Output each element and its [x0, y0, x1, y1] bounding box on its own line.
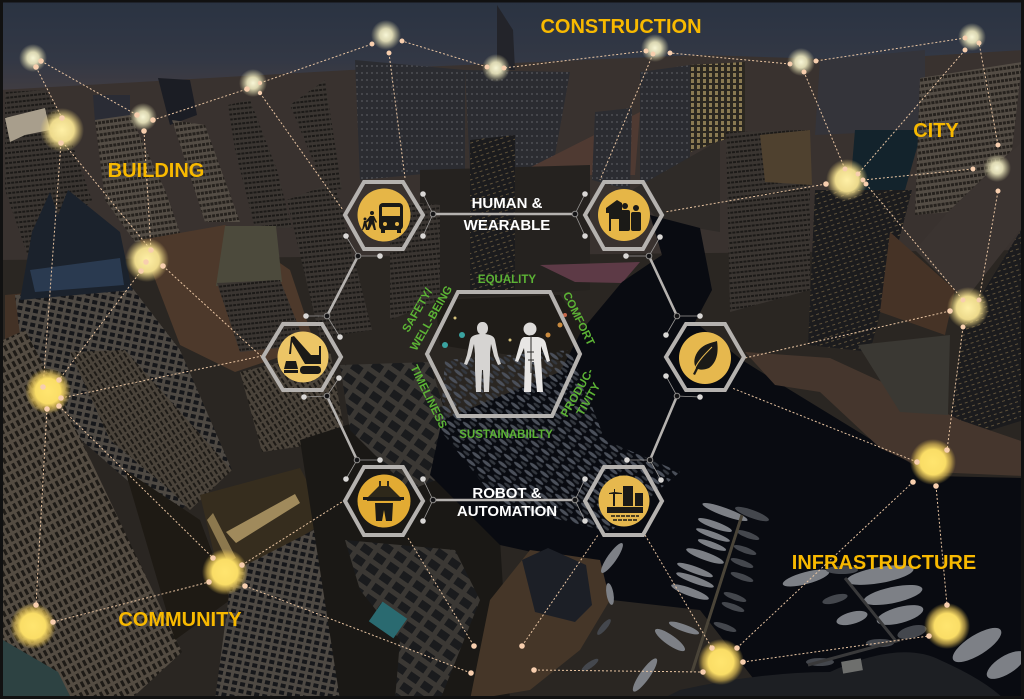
- water: [430, 215, 1024, 700]
- icon hexagon: excavator: [263, 324, 341, 390]
- label: safety well-being: SAFETY/: [401, 286, 436, 335]
- promenade arc: [660, 652, 1005, 700]
- figure: human silhouette: [464, 322, 501, 392]
- marina boats 2: [781, 561, 1024, 684]
- marina boats 1: [668, 500, 770, 672]
- marina boats 3: [580, 541, 688, 694]
- garden and villas: [300, 395, 510, 700]
- label: comfort: COMFORT: [560, 290, 596, 348]
- lower-left towers: [3, 330, 182, 700]
- heading: robot and automation: AUTOMATION: [457, 503, 557, 520]
- icon hexagon: leaf: [666, 324, 744, 390]
- label: timeliness: TIMELINESS: [407, 363, 449, 431]
- bottom-centre tower: [215, 528, 345, 700]
- label: equality: EQUALITY: [478, 274, 536, 286]
- hazy distant city: [0, 50, 1024, 260]
- heading: human and wearable: WEARABLE: [464, 217, 550, 234]
- heading: robot and automation: ROBOT &: [472, 485, 542, 502]
- label: sustainability: SUSTAINABIILTY: [459, 429, 553, 441]
- mid-left buildings: [216, 226, 282, 286]
- round building: [522, 548, 592, 622]
- central marina: [440, 350, 680, 532]
- central hexagon: [427, 292, 580, 416]
- heading: infrastructure: INFRASTRUCTURE: [792, 552, 976, 574]
- hexagon connectors: [301, 191, 703, 524]
- heading: human and wearable: HUMAN &: [472, 195, 543, 212]
- land under central hexagon: [435, 295, 585, 362]
- crown tower: [15, 285, 232, 518]
- label: safety well-being: WELL-BEING: [408, 284, 455, 353]
- far left towers: [5, 90, 92, 262]
- figure: wearable exoskeleton suit: [515, 322, 550, 392]
- icon hexagon: city, crane and water: [585, 467, 662, 535]
- sand promenade: [470, 550, 610, 700]
- top-right towers: [726, 130, 810, 312]
- rooftop hotel: [200, 468, 328, 572]
- centre towers: [355, 60, 465, 180]
- hexagon city lights: [442, 313, 567, 348]
- sky: [0, 0, 1024, 110]
- icon hexagon: bridge and robot legs: [345, 467, 423, 535]
- heading: community: COMMUNITY: [118, 609, 242, 631]
- heading: city: CITY: [913, 120, 959, 142]
- spire: [497, 5, 515, 70]
- heading: construction: CONSTRUCTION: [540, 16, 702, 38]
- label: productivity: PRODUC-: [559, 367, 596, 419]
- lit shore: [745, 352, 1024, 476]
- icon hexagon: family and house: [585, 182, 662, 249]
- heading: building: BUILDING: [108, 160, 204, 182]
- icon hexagon: bus and pedestrians: [345, 182, 423, 249]
- orange city road glow: [140, 225, 315, 372]
- label: productivity: TIVITY: [575, 381, 603, 418]
